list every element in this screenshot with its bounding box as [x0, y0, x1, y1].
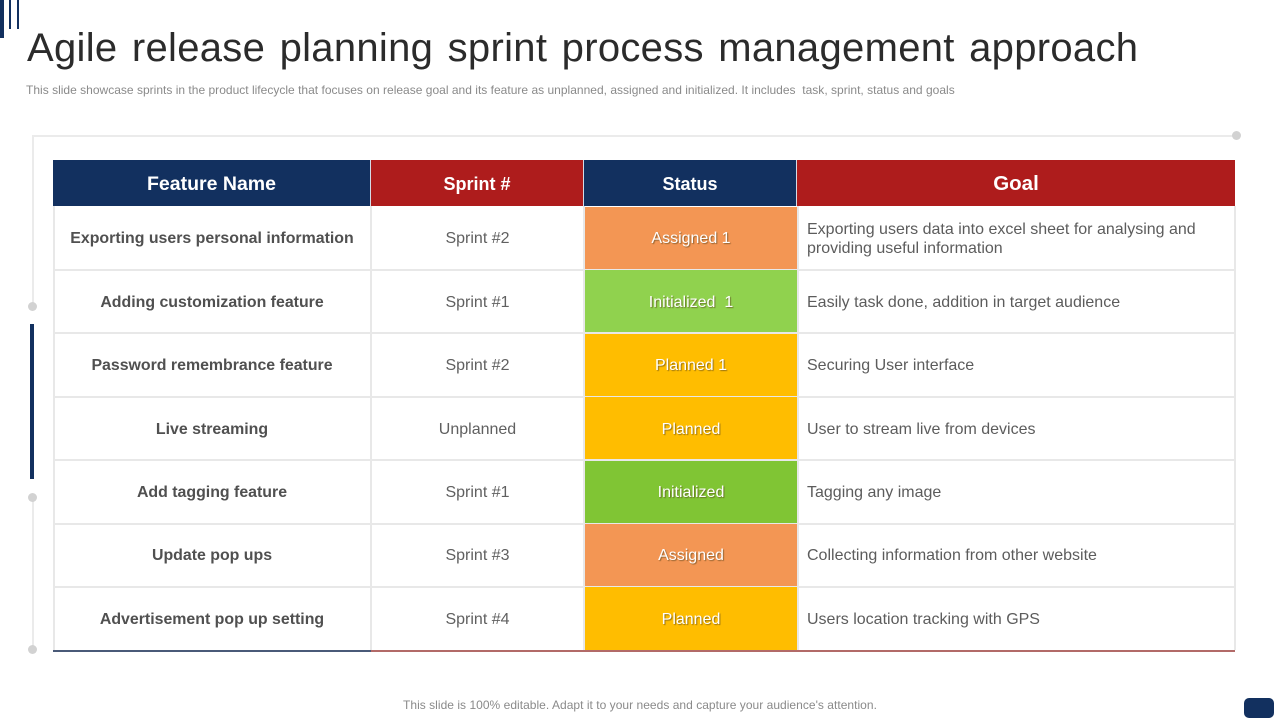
row 3: Sprint #2 — [445, 357, 510, 374]
row 7: Planned — [662, 610, 720, 628]
decorative corner bars — [0, 0, 19, 38]
row 3: Planned 1 — [655, 357, 727, 374]
row 5: Add tagging feature — [137, 484, 287, 501]
row 4: Live streaming — [156, 420, 268, 438]
row 4: Planned — [662, 420, 720, 438]
table header row: Goal — [993, 172, 1039, 195]
row 4: Unplanned — [439, 420, 516, 438]
row 6: Collecting information from other website — [807, 547, 1097, 564]
row 7: Sprint #4 — [445, 610, 510, 628]
footer note: This slide is 100% editable. Adapt it to your needs and capture your audience's attention. — [403, 698, 877, 712]
row 1: providing useful information — [807, 240, 1003, 257]
row 1: Exporting users personal information — [70, 230, 354, 247]
row 4 — [156, 420, 1036, 438]
row 5: Initialized — [658, 484, 724, 501]
row 7 — [100, 610, 1040, 628]
row 6 — [152, 547, 1097, 565]
table header row: Sprint # — [443, 174, 510, 194]
row 2 — [100, 294, 1120, 311]
frame: top and left line with dots — [28, 131, 1241, 654]
row 1 — [70, 220, 1196, 257]
row 2: Easily task done, addition in target audience — [807, 294, 1120, 311]
row 1: Sprint #2 — [445, 230, 510, 247]
row 2: Adding customization feature — [100, 294, 324, 310]
row 7: Advertisement pop up setting — [100, 610, 324, 628]
page number badge — [1244, 698, 1274, 718]
row 6: Assigned — [658, 547, 724, 564]
row 6: Update pop ups — [152, 547, 272, 564]
row 2: Sprint #1 — [445, 294, 510, 310]
row 1: Exporting users data into excel sheet for analysing and — [807, 220, 1196, 238]
row 5 — [137, 484, 941, 501]
row 4: User to stream live from devices — [807, 421, 1036, 438]
status cells — [585, 207, 797, 650]
row 1: Assigned 1 — [651, 230, 731, 247]
row 2: Initialized 1 — [649, 294, 733, 310]
row 5: Sprint #1 — [445, 484, 510, 501]
title: Agile release planning sprint process management approach — [27, 26, 1138, 70]
table header row: Feature Name — [147, 172, 276, 194]
row 7: Users location tracking with GPS — [807, 611, 1040, 628]
row 3: Securing User interface — [807, 357, 974, 374]
row 6: Sprint #3 — [445, 547, 510, 564]
subtitle: This slide showcase sprints in the product lifecycle that focuses on release goal and its feature as unplanned, assigned and initialized. It includes task, sprint, status and goals — [26, 83, 955, 97]
row 5: Tagging any image — [807, 484, 941, 501]
row 3 — [91, 357, 974, 374]
table header row — [53, 160, 1235, 206]
table header row: Status — [662, 174, 718, 194]
row 3: Password remembrance feature — [91, 357, 333, 374]
